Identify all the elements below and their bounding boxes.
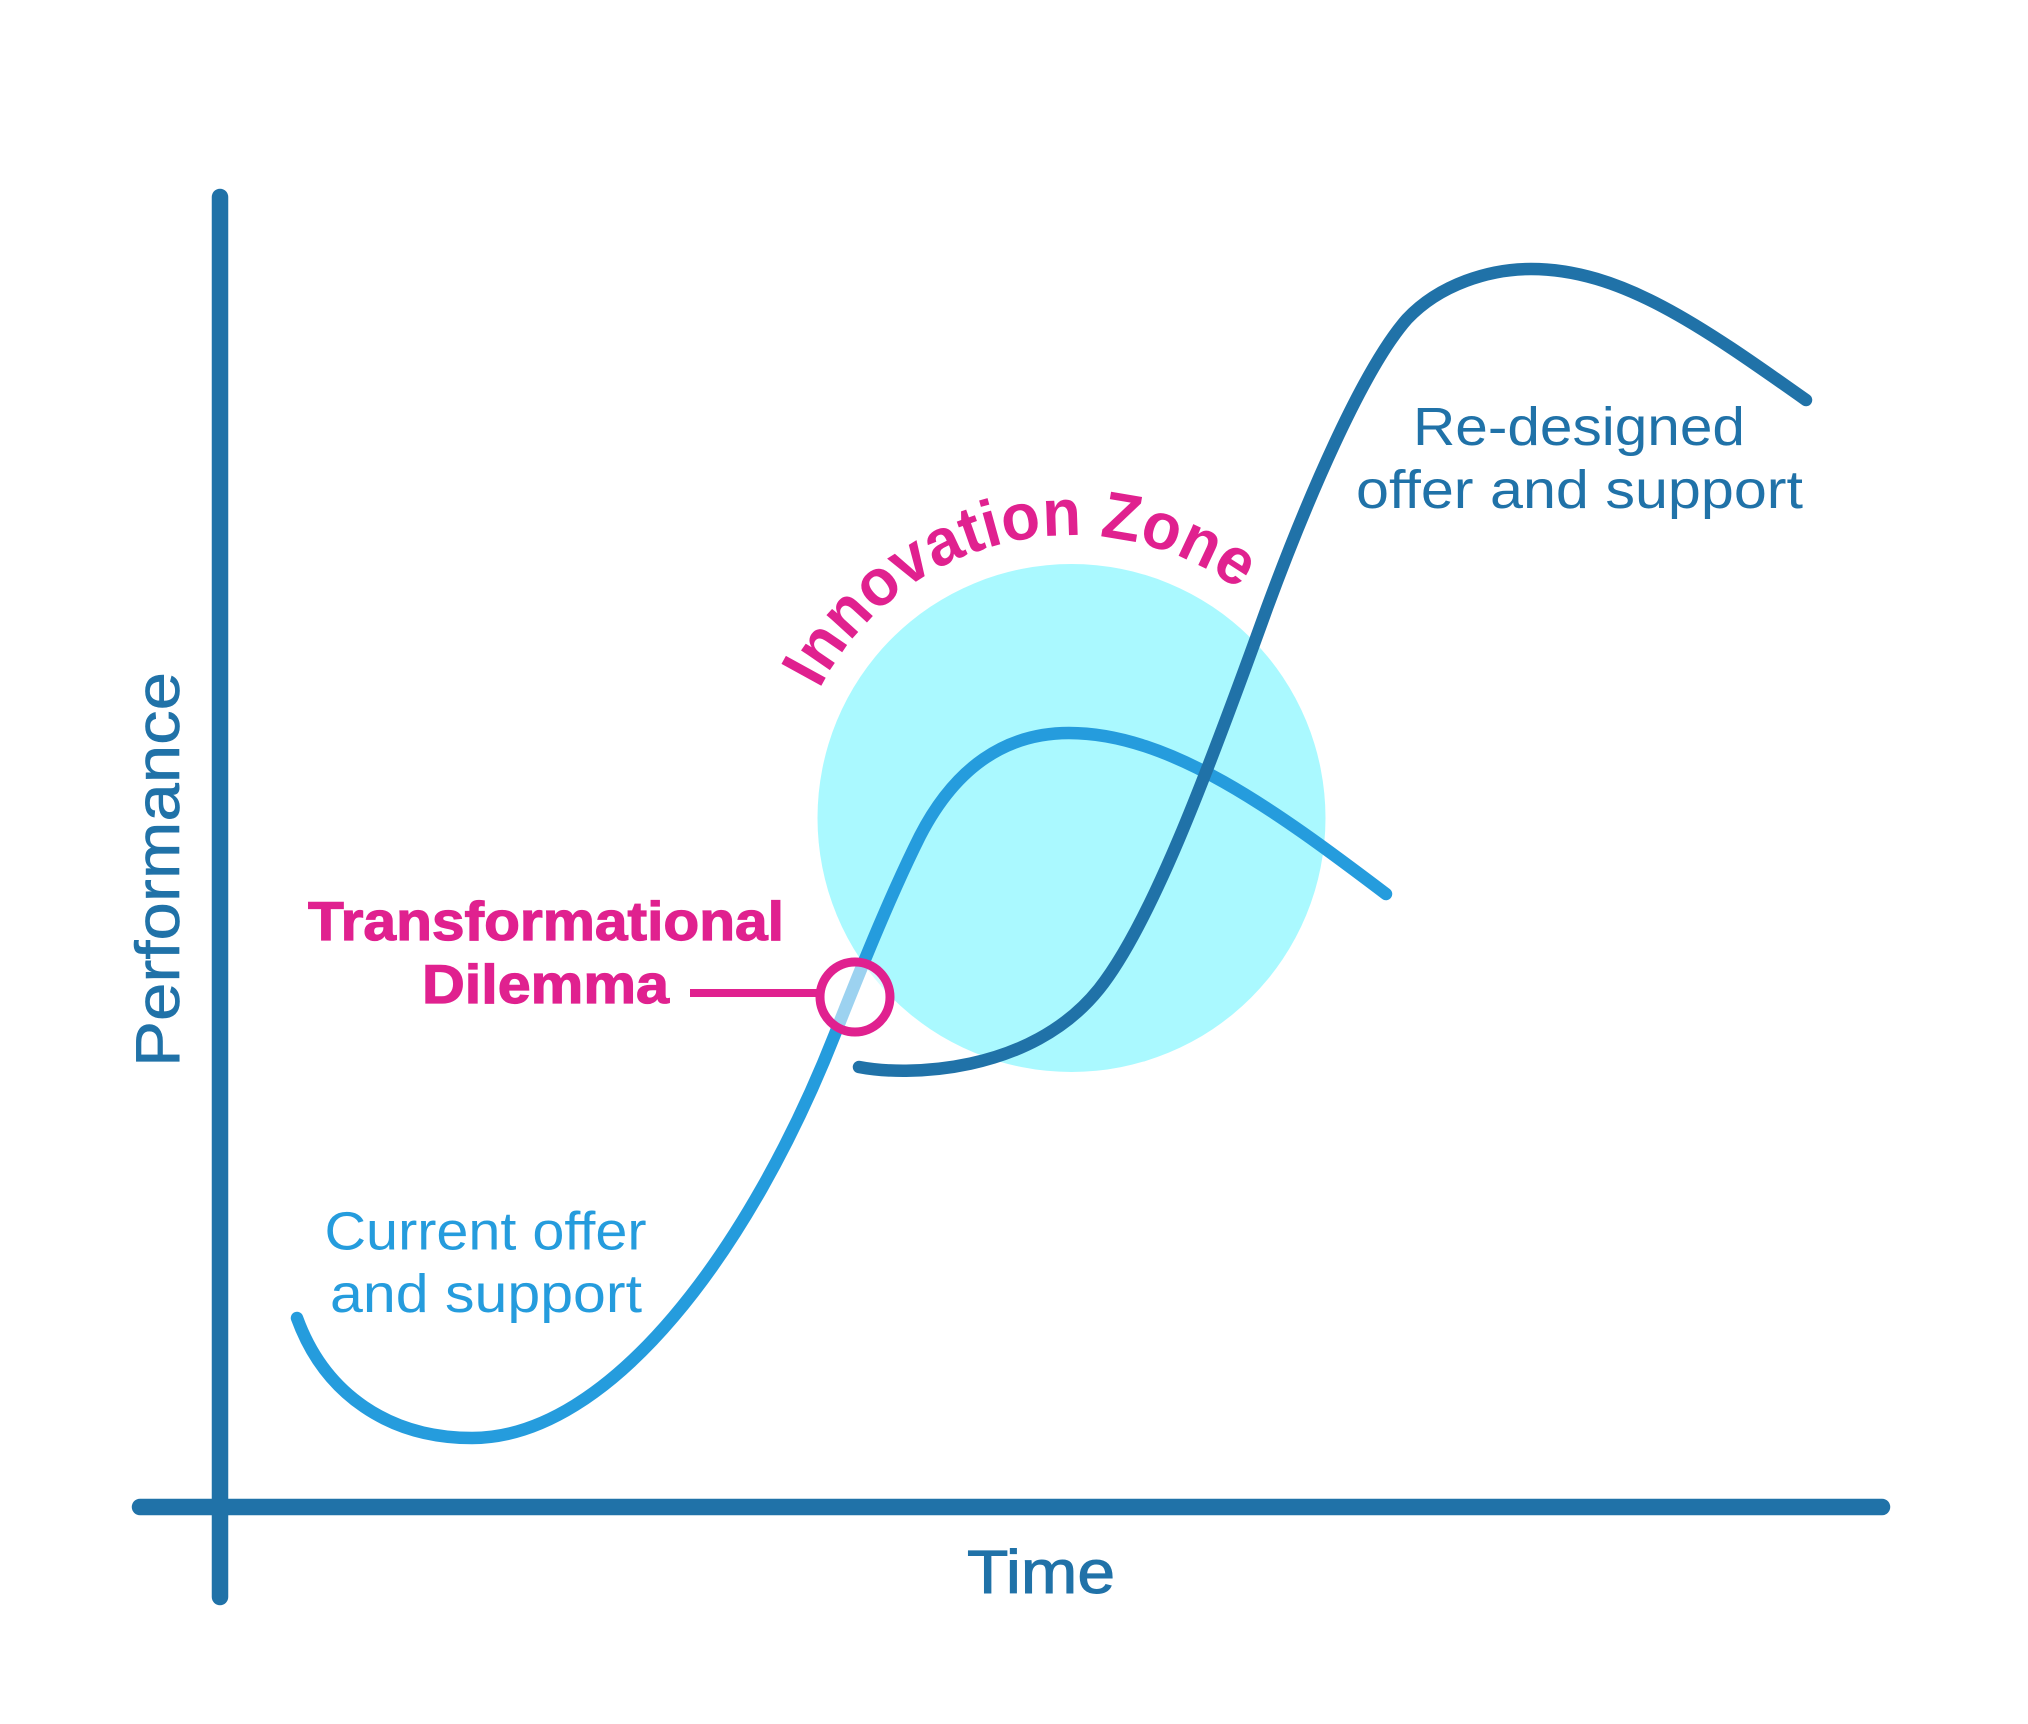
dilemma marker ring <box>820 962 890 1032</box>
label: Transformational Dilemma <box>308 890 784 1015</box>
chart axes <box>140 197 1882 1597</box>
label: Re-designed offer and support: Re-designed <box>1413 397 1745 457</box>
label: Current offer and support: Current offer <box>324 1202 647 1262</box>
label: Transformational Dilemma: Transformational <box>308 890 784 952</box>
label: Innovation Zone curved text: Innovation Zone <box>782 492 1251 686</box>
label: Current offer and support: and support <box>330 1264 642 1324</box>
curve: re-designed offer and support <box>859 269 1806 1071</box>
label: Transformational Dilemma: Dilemma <box>422 953 669 1015</box>
innovation zone circle <box>818 564 1326 1072</box>
x axis label: Time: Time <box>967 1538 1115 1606</box>
y axis label: Performance: Performance <box>124 672 193 1067</box>
curve: current offer and support <box>297 733 1386 1438</box>
label: Re-designed offer and support <box>1356 397 1803 520</box>
label: Current offer and support <box>324 1202 647 1324</box>
connector line to dilemma marker <box>690 989 820 997</box>
label: Re-designed offer and support: offer and support <box>1356 460 1803 520</box>
